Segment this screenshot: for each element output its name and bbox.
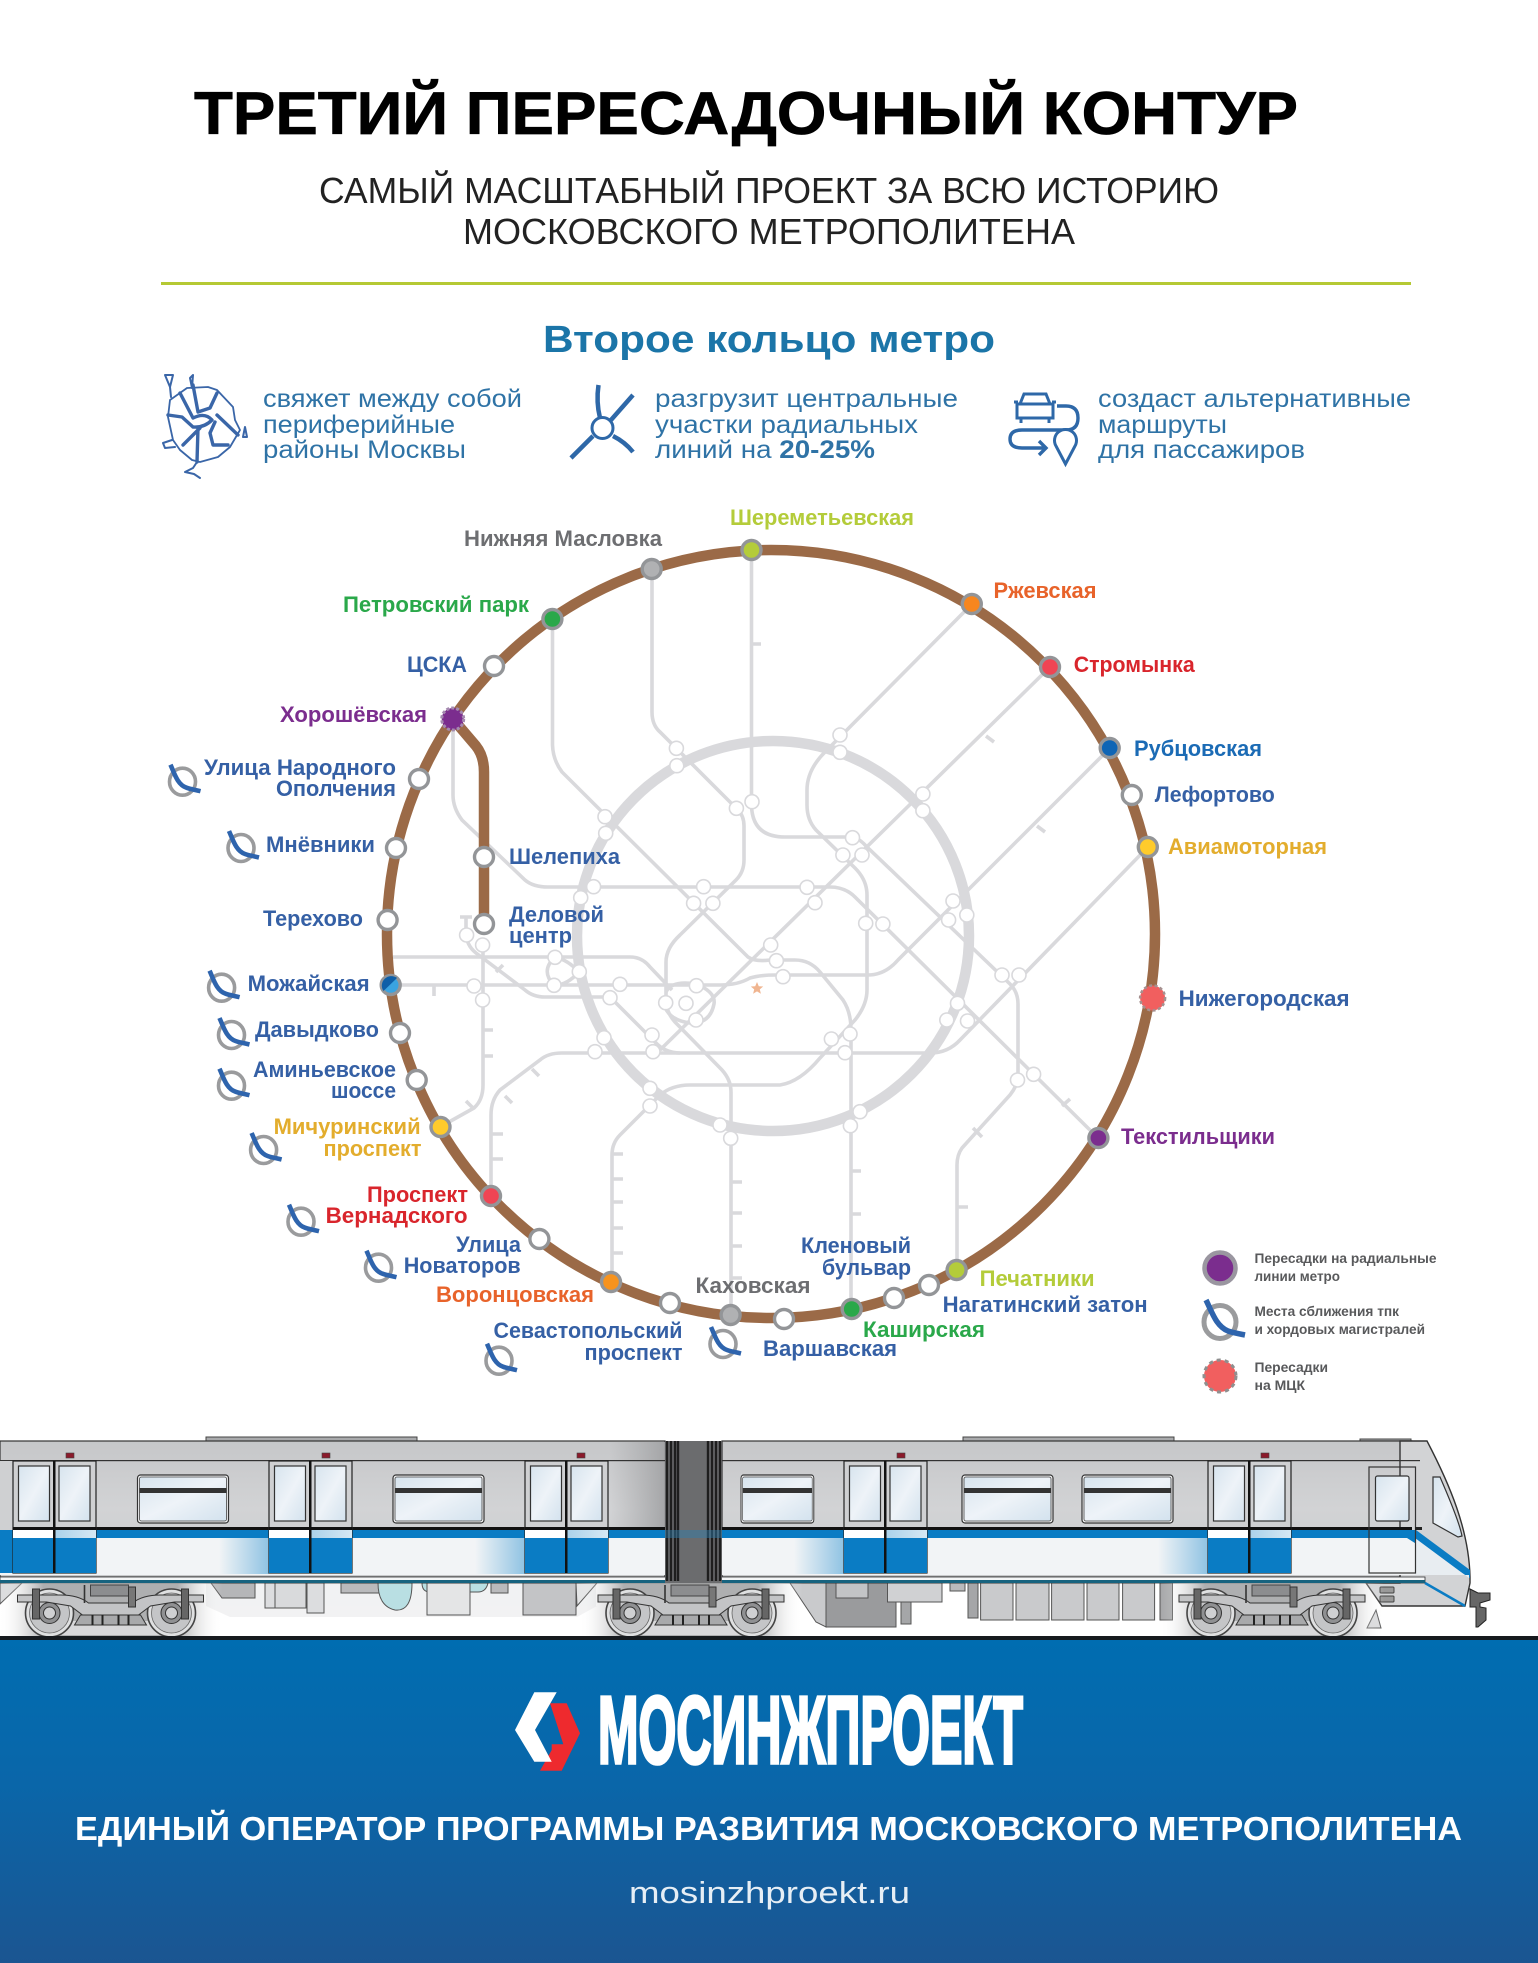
station: Давыдково (218, 1017, 410, 1048)
text: создаст альтернативные (1098, 385, 1411, 413)
station: Проспект Вернадского: Проспект (367, 1182, 468, 1207)
station: Шелепиха: Шелепиха (509, 844, 621, 869)
subtitle: МОСКОВСКОГО МЕТРОПОЛИТЕНА (463, 211, 1075, 252)
station: Можайская (209, 971, 400, 1001)
text: разгрузит центральные (655, 385, 958, 413)
bogies (0, 1583, 1384, 1637)
text: маршруты (1098, 411, 1227, 439)
station: Кленовый бульвар (801, 1233, 911, 1308)
station: Петровский парк: Петровский парк (343, 592, 530, 617)
star: city centre (751, 982, 763, 994)
station: Воронцовская (436, 1272, 620, 1307)
station: Каширская: Каширская (863, 1317, 985, 1342)
subtitle (319, 169, 1219, 252)
station: Можайская: Можайская (248, 971, 370, 996)
station: Мичуринский проспект: проспект (324, 1136, 422, 1161)
station: Шереметьевская (730, 505, 914, 560)
station: Воронцовская: Воронцовская (436, 1282, 594, 1307)
station: Варшавская: Варшавская (763, 1336, 897, 1361)
section heading: Второе кольцо метро (543, 319, 995, 361)
station: Кленовый бульвар: Кленовый (801, 1233, 911, 1258)
rail (0, 1636, 1538, 1640)
text: периферийные (263, 411, 455, 439)
station: Рубцовская: Рубцовская (1134, 736, 1262, 761)
big circle line (brown ring) (387, 550, 1155, 1318)
interchange circles (460, 728, 1041, 1145)
text: районы Москвы (263, 436, 466, 464)
station: Ржевская (962, 578, 1096, 614)
feature: relieves centre (571, 385, 958, 464)
station: Улица Народного Ополчения: Ополчения (276, 776, 396, 801)
station: Улица Народного Ополчения (170, 755, 428, 801)
station: Печатники (947, 1260, 1095, 1291)
cab door and windows (1369, 1467, 1462, 1602)
station: Петровский парк (343, 592, 562, 628)
station: Улица Новаторов: Улица (456, 1232, 522, 1257)
red markers (66, 1453, 1269, 1458)
logo mark (515, 1692, 580, 1771)
text: свяжет между собой (263, 385, 522, 413)
station: Кленовый бульвар: бульвар (822, 1255, 911, 1280)
website: mosinzhproekt.ru (629, 1875, 910, 1910)
station: Мичуринский проспект: Мичуринский (274, 1114, 421, 1139)
legend (1204, 1251, 1437, 1393)
door sets (0, 1461, 1291, 1573)
footer statement: ЕДИНЫЙ ОПЕРАТОР ПРОГРАММЫ РАЗВИТИЯ МОСКОВСКОГО МЕТРОПОЛИТЕНА (75, 1809, 1462, 1847)
legend item: radial interchanges (1204, 1251, 1437, 1284)
station: Аминьевское шоссе (218, 1057, 426, 1103)
icon: car route pin (1010, 394, 1078, 464)
station: Проспект Вернадского (288, 1182, 500, 1235)
legend item: radial interchanges: Пересадки на радиальные (1254, 1251, 1437, 1266)
feature: alternative routes (1010, 385, 1411, 464)
metro network background (391, 550, 1148, 1315)
underbody equipment (0, 1583, 1381, 1628)
icon: hub (571, 385, 633, 458)
car bodies (0, 1441, 665, 1577)
station: Давыдково: Давыдково (255, 1017, 379, 1042)
station: Севастопольский проспект: проспект (584, 1340, 683, 1365)
nose of the train (1366, 1441, 1470, 1606)
legend item: MCC interchanges: Пересадки (1254, 1360, 1328, 1375)
text (263, 385, 522, 464)
legend item: TPK and chord proximity: и хордовых магистралей (1254, 1322, 1425, 1337)
coupler (1470, 1589, 1490, 1627)
station: ЦСКА (407, 652, 504, 677)
windows (138, 1475, 1173, 1523)
text: для пассажиров (1098, 436, 1305, 464)
station: Мичуринский проспект (251, 1114, 450, 1164)
station: ЦСКА: ЦСКА (407, 652, 467, 677)
footer band (0, 1640, 1538, 1963)
station: Нагатинский затон (920, 1276, 1148, 1317)
icon: moscow map (163, 375, 247, 478)
station: Деловой центр (474, 902, 604, 948)
station: Деловой центр: Деловой (509, 902, 604, 927)
station: Аминьевское шоссе: Аминьевское (253, 1057, 396, 1082)
station: Севастопольский проспект (486, 1294, 683, 1374)
station: Севастопольский проспект: Севастопольский (494, 1318, 682, 1343)
station: Варшавская (710, 1310, 897, 1361)
station: Терехово: Терехово (263, 906, 363, 931)
text: участки радиальных (655, 411, 919, 439)
train illustration (0, 1437, 1538, 1640)
subtitle: САМЫЙ МАСШТАБНЫЙ ПРОЕКТ ЗА ВСЮ ИСТОРИЮ (319, 169, 1219, 211)
station: Нижегородская: Нижегородская (1179, 986, 1350, 1011)
legend item: TPK and chord proximity (1204, 1300, 1425, 1338)
station: Лефортово: Лефортово (1155, 782, 1275, 807)
station: Нижняя Масловка (464, 526, 663, 578)
station: Мнёвники (228, 831, 406, 862)
station: Улица Народного Ополчения: Улица Народного (204, 755, 396, 780)
legend item: MCC interchanges (1204, 1360, 1328, 1393)
station: Текстильщики: Текстильщики (1121, 1124, 1275, 1149)
title: ТРЕТИЙ ПЕРЕСАДОЧНЫЙ КОНТУР (194, 80, 1298, 147)
station: Деловой центр: центр (509, 923, 572, 948)
text (655, 385, 958, 464)
text (1098, 385, 1411, 464)
legend item: TPK and chord proximity: Места сближения тпк (1254, 1304, 1399, 1319)
station: Шереметьевская: Шереметьевская (730, 505, 914, 530)
station: Авиамоторная: Авиамоторная (1168, 834, 1327, 859)
logo wordmark: МОСИНЖПРОЕКТ (598, 1677, 1023, 1784)
station: Ржевская: Ржевская (994, 578, 1096, 603)
gangway between cars (665, 1441, 722, 1583)
legend item: radial interchanges: линии метро (1254, 1269, 1340, 1284)
station: Аминьевское шоссе: шоссе (331, 1078, 396, 1103)
inner ring (577, 741, 969, 1131)
station: Стромынка: Стромынка (1074, 652, 1195, 677)
station: Каховская (696, 1273, 810, 1324)
station: Каховская: Каховская (696, 1273, 810, 1298)
roof equipment (206, 1437, 1411, 1442)
station: Нагатинский затон: Нагатинский затон (943, 1292, 1148, 1317)
lower white panels and blue stripes (0, 1460, 1470, 1606)
text: линий на 20-25% (655, 436, 875, 464)
station: Нижняя Масловка: Нижняя Масловка (464, 526, 663, 551)
station: Проспект Вернадского: Вернадского (326, 1203, 468, 1228)
station: Печатники: Печатники (980, 1266, 1095, 1291)
station: Хорошёвская: Хорошёвская (280, 702, 427, 727)
station: Каширская (842, 1300, 985, 1342)
station: Мнёвники: Мнёвники (266, 832, 375, 857)
legend item: MCC interchanges: на МЦК (1254, 1378, 1306, 1393)
ticks (434, 644, 1070, 1278)
station: Улица Новаторов: Новаторов (404, 1253, 521, 1278)
feature: connects districts (163, 375, 522, 478)
station: Улица Новаторов (366, 1230, 549, 1281)
